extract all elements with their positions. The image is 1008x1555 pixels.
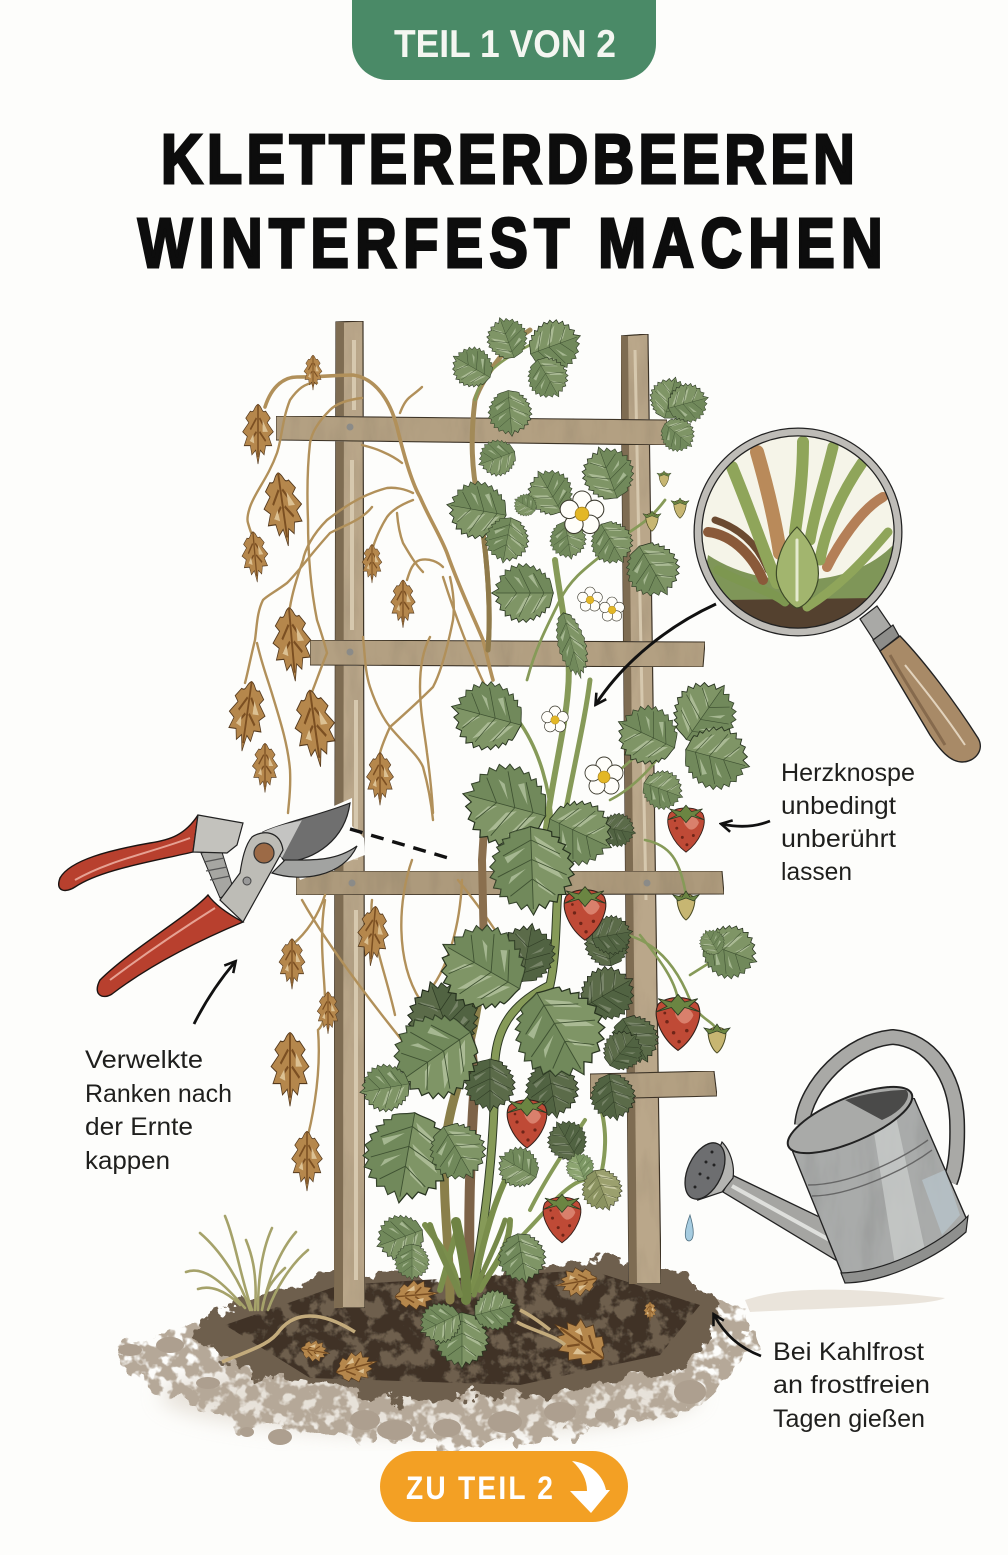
- rail 2: [310, 640, 705, 667]
- label: wilted vines: [85, 1046, 232, 1175]
- flowers: [542, 491, 624, 794]
- loose clods: [118, 1337, 706, 1445]
- label: heart bud: Herzknospe: [781, 759, 915, 787]
- lower handle: [97, 895, 243, 996]
- label: heart bud: unberührt: [781, 825, 896, 853]
- arrow to heart bud: [596, 604, 716, 704]
- rail 3: [296, 871, 724, 895]
- lower blade: [272, 846, 357, 877]
- buds: [643, 471, 730, 1053]
- badge: part 1 of 2: [352, 0, 656, 80]
- upper leaves: [442, 311, 758, 816]
- rose cone: [698, 1142, 733, 1200]
- top opening: [780, 1074, 920, 1166]
- lower leaves: [369, 1208, 550, 1368]
- right post: [621, 334, 661, 1284]
- spring: [201, 849, 234, 898]
- dark back foliage: [397, 810, 668, 1167]
- label: heart bud: unbedingt: [781, 792, 896, 820]
- base rim: [841, 1216, 968, 1283]
- withered vines: [245, 375, 495, 1150]
- pruning shears: [59, 798, 365, 996]
- withered leaves: [224, 355, 415, 1191]
- label: watering: Bei Kahlfrost: [773, 1338, 924, 1366]
- ground leaves: [222, 1264, 656, 1387]
- rail 1: [276, 416, 667, 445]
- label: heart bud: [781, 759, 915, 886]
- soil core: [190, 1258, 725, 1402]
- lens ring: [698, 432, 898, 632]
- left post: [334, 321, 365, 1308]
- soil halo: [160, 1355, 700, 1435]
- badge: part 1 of 2: TEIL 1 VON 2: [394, 23, 616, 66]
- icon: curved down arrow: [570, 1461, 610, 1513]
- title: WINTERFEST MACHEN: [138, 204, 883, 282]
- base stems over leaves: [430, 1220, 505, 1300]
- label: heart bud: lassen: [781, 858, 852, 886]
- wooden trellis: [276, 321, 724, 1308]
- label: watering: [773, 1338, 930, 1433]
- large central leaves: [356, 755, 766, 1217]
- wet ground stain: [745, 1290, 945, 1312]
- lens content: [703, 436, 892, 628]
- strawberries: [507, 805, 704, 1243]
- grass tuft: [186, 1216, 308, 1310]
- arrow to strawberry: [722, 821, 770, 826]
- upper blade: [263, 803, 350, 862]
- watering can: [677, 1037, 968, 1283]
- spout: [723, 1175, 851, 1268]
- arrow to soil: [714, 1315, 761, 1356]
- upper handle: [59, 815, 198, 890]
- title: [138, 120, 883, 282]
- label: watering: an frostfreien: [773, 1371, 930, 1399]
- lens: [700, 434, 896, 630]
- body: [792, 1098, 967, 1276]
- label: wilted vines: Ranken nach: [85, 1080, 232, 1108]
- label: wilted vines: kappen: [85, 1147, 170, 1175]
- button: to part 2: ZU TEIL 2: [406, 1471, 553, 1506]
- rail 4: [590, 1071, 717, 1099]
- handle highlights: [75, 838, 215, 980]
- button: to part 2: [380, 1451, 628, 1522]
- water drop: [685, 1215, 693, 1241]
- pivot bolt: [254, 843, 274, 863]
- handle: [860, 606, 980, 762]
- top grip metal: [193, 815, 243, 853]
- stems: [425, 330, 730, 1300]
- magnifying glass: heart bud detail: [695, 432, 980, 762]
- label: wilted vines: Verwelkte: [85, 1046, 203, 1074]
- label: watering: Tagen gießen: [773, 1405, 925, 1433]
- label: wilted vines: der Ernte: [85, 1113, 193, 1141]
- rose face: [677, 1137, 733, 1205]
- pivot body: [220, 833, 283, 922]
- blade halo: [280, 798, 365, 880]
- strawberry plant: [356, 311, 766, 1369]
- handle: [802, 1037, 957, 1182]
- arrow to shears: [194, 962, 235, 1024]
- title: KLETTERERDBEEREN: [161, 120, 855, 198]
- soil bed: [118, 1258, 945, 1448]
- dashed cut line: [350, 829, 455, 860]
